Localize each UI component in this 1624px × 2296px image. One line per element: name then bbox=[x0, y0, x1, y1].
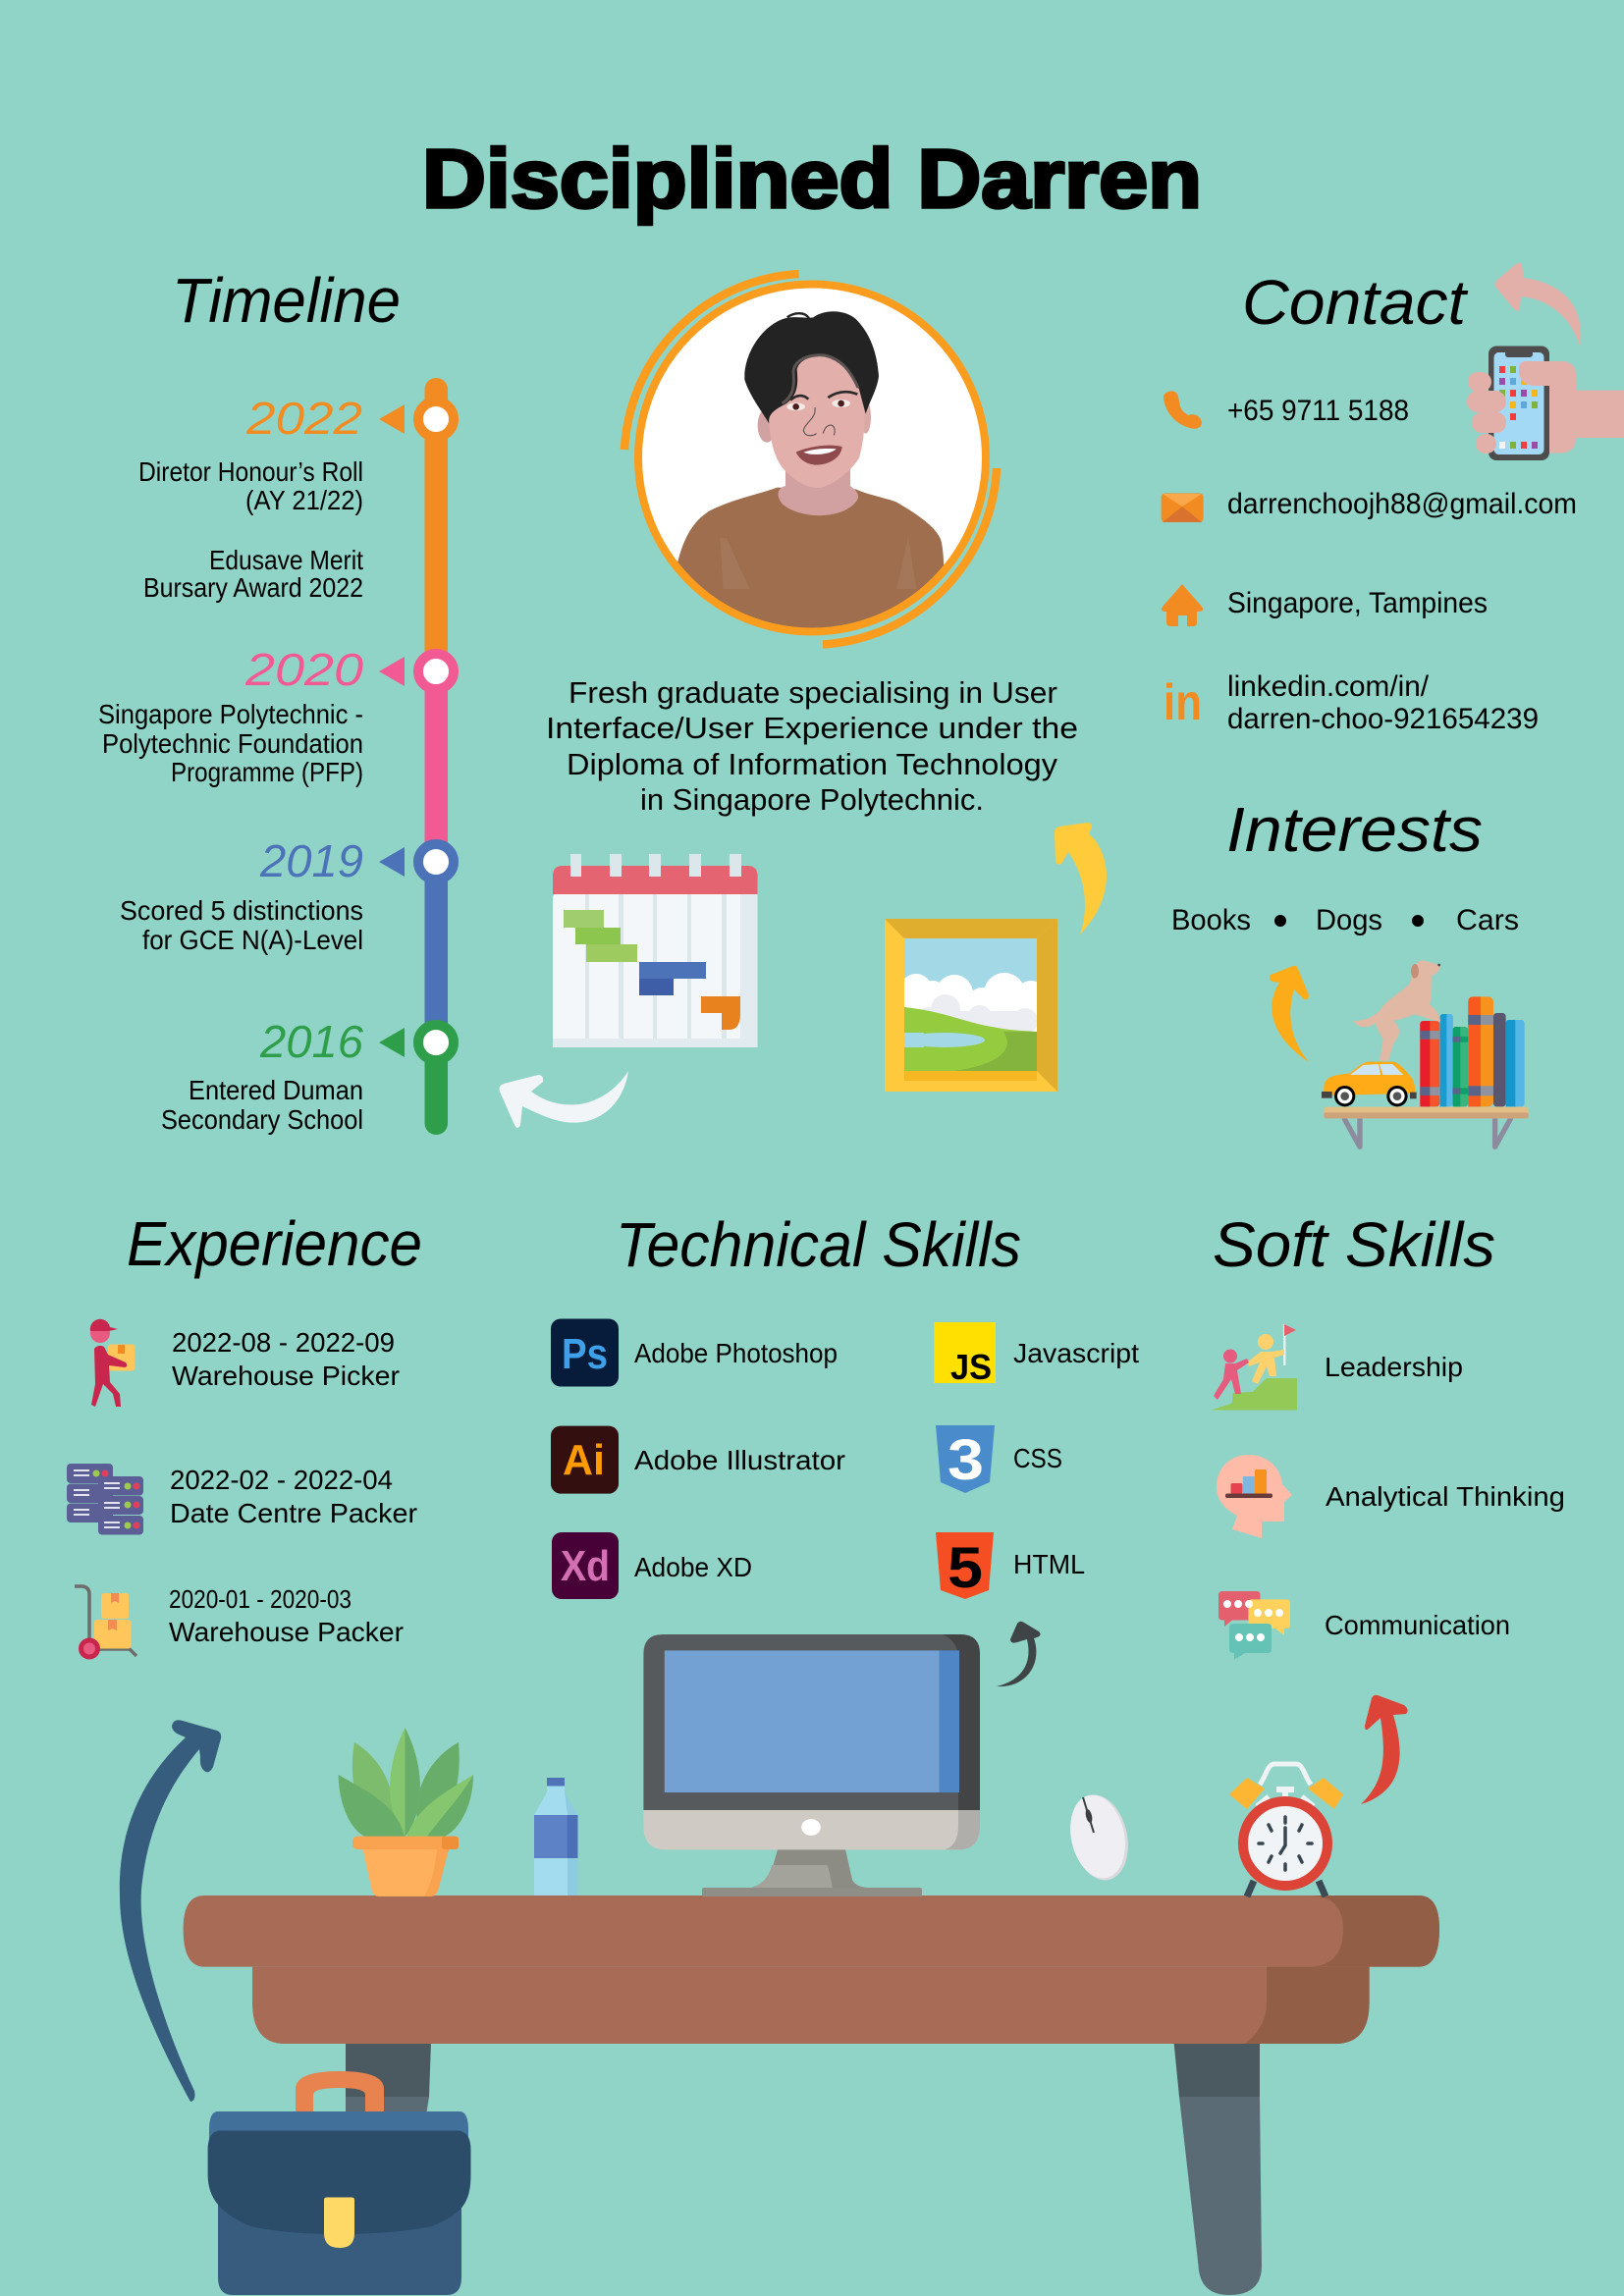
skill: illustrator: Ai bbox=[563, 1436, 605, 1484]
desk left leg bbox=[346, 2042, 431, 2115]
contact: linkedin bbox=[1164, 670, 1539, 735]
interests list: Books bbox=[1171, 904, 1251, 936]
skill: xd bbox=[552, 1532, 752, 1599]
experience item: data centre packer: Date Centre Packer bbox=[170, 1498, 417, 1528]
text block: summary: Diploma of Information Technology bbox=[567, 747, 1058, 781]
illustration: briefcase bbox=[208, 2071, 471, 2295]
skill: html: 5 bbox=[947, 1536, 983, 1600]
timeline entry 2020 bbox=[98, 644, 454, 787]
title: Disciplined Darren bbox=[422, 133, 1202, 225]
skill: illustrator: Adobe Illustrator bbox=[634, 1445, 845, 1475]
skill: communication bbox=[1218, 1591, 1510, 1660]
timeline entry 2020: Singapore Polytechnic - bbox=[98, 699, 363, 729]
experience item: data centre packer bbox=[67, 1464, 417, 1535]
heading: timeline: Timeline bbox=[172, 265, 401, 336]
contact: location bbox=[1162, 584, 1488, 626]
icon: trolley bbox=[75, 1586, 136, 1659]
illustration: desk bbox=[184, 1896, 1439, 2295]
illustration: shelf with books, dog and car bbox=[1322, 960, 1529, 1147]
icon: climbing team bbox=[1212, 1324, 1297, 1410]
text block: summary: in Singapore Polytechnic. bbox=[640, 782, 984, 817]
monitor stand bbox=[702, 1849, 922, 1896]
panel: timeline bbox=[98, 265, 454, 1135]
skill: illustrator bbox=[551, 1426, 845, 1494]
timeline entry 2019: Scored 5 distinctions bbox=[120, 895, 363, 926]
arrow: red bbox=[1361, 1695, 1408, 1804]
text block: summary: Fresh graduate specialising in User bbox=[568, 675, 1057, 710]
illustration: alarm clock bbox=[1229, 1764, 1343, 1896]
skill: photoshop: Adobe Photoshop bbox=[634, 1338, 838, 1368]
timeline entry 2016: Entered Duman bbox=[189, 1075, 363, 1105]
contact: location: Singapore, Tampines bbox=[1227, 587, 1488, 619]
experience item: data centre packer: 2022-02 - 2022-04 bbox=[170, 1465, 393, 1495]
experience item: warehouse picker bbox=[90, 1319, 400, 1407]
skill: xd: Adobe XD bbox=[634, 1552, 752, 1582]
skill: leadership bbox=[1212, 1324, 1463, 1410]
timeline entry 2020: Programme (PFP) bbox=[171, 757, 363, 787]
monitor chin bbox=[643, 1810, 980, 1849]
desk right leg bbox=[1174, 2042, 1262, 2295]
icon: servers bbox=[67, 1464, 143, 1535]
skill: html: HTML bbox=[1013, 1549, 1085, 1579]
illustration: monitor bbox=[643, 1634, 980, 1896]
timeline track bbox=[424, 378, 448, 1135]
illustration: mouse bbox=[1063, 1789, 1136, 1886]
icon: delivery worker bbox=[90, 1319, 135, 1407]
timeline entry 2020: 2020 bbox=[244, 644, 363, 695]
experience item: warehouse packer bbox=[75, 1584, 404, 1659]
timeline entry 2022: Bursary Award 2022 bbox=[143, 572, 363, 603]
heading: experience: Experience bbox=[127, 1208, 422, 1279]
skill: analytical thinking bbox=[1217, 1455, 1565, 1538]
timeline entry 2016: 2016 bbox=[259, 1016, 363, 1067]
desk top bbox=[184, 1896, 1439, 1967]
skill: css: CSS bbox=[1013, 1443, 1062, 1473]
arrow: yellow bbox=[1055, 823, 1107, 934]
arrow: dark bbox=[997, 1622, 1041, 1686]
skill: css: 3 bbox=[947, 1428, 984, 1492]
illustration: water bottle bbox=[534, 1778, 577, 1896]
timeline entry 2016 bbox=[161, 1016, 454, 1135]
heading: technical skills: Technical Skills bbox=[616, 1209, 1021, 1280]
arrow: blue bbox=[120, 1720, 221, 2102]
timeline entry 2020: Polytechnic Foundation bbox=[102, 728, 363, 759]
skill: javascript bbox=[934, 1322, 1139, 1387]
panel: experience bbox=[67, 1208, 422, 1659]
experience item: warehouse packer: Warehouse Packer bbox=[169, 1617, 404, 1647]
skill: css bbox=[936, 1425, 1062, 1493]
contact: linkedin: darren-choo-921654239 bbox=[1227, 703, 1539, 735]
skill: javascript: JS bbox=[950, 1347, 992, 1387]
interests list: Dogs bbox=[1316, 904, 1382, 936]
skill: photoshop bbox=[551, 1319, 838, 1386]
timeline entry 2022: (AY 21/22) bbox=[245, 485, 363, 515]
timeline entry 2019: 2019 bbox=[259, 835, 363, 886]
skill: javascript: Javascript bbox=[1013, 1338, 1139, 1368]
portrait bbox=[624, 274, 997, 655]
heading: interests: Interests bbox=[1226, 794, 1483, 865]
arrow: pink bbox=[1494, 263, 1581, 346]
timeline entry 2022 bbox=[138, 393, 454, 603]
interests list: Cars bbox=[1456, 904, 1519, 936]
panel: technical skills bbox=[551, 1209, 1139, 1600]
arrow: orange bbox=[1270, 966, 1309, 1062]
experience item: warehouse picker: 2022-08 - 2022-09 bbox=[172, 1327, 395, 1358]
panel: soft skills bbox=[1212, 1209, 1565, 1660]
panel: contact bbox=[1162, 263, 1624, 735]
heading: contact: Contact bbox=[1242, 267, 1468, 338]
skill: communication: Communication bbox=[1325, 1610, 1510, 1640]
skill: leadership: Leadership bbox=[1325, 1352, 1463, 1382]
timeline entry 2022: 2022 bbox=[245, 393, 362, 444]
heading: soft skills: Soft Skills bbox=[1213, 1209, 1495, 1280]
contact: email: darrenchoojh88@gmail.com bbox=[1227, 488, 1577, 520]
timeline entry 2016: Secondary School bbox=[161, 1104, 363, 1135]
interests list bbox=[1171, 904, 1519, 936]
icon: hand holding phone bbox=[1467, 346, 1624, 460]
skill: html bbox=[936, 1532, 1085, 1600]
skill: photoshop: Ps bbox=[562, 1330, 608, 1378]
monitor bezel bbox=[643, 1634, 980, 1810]
skill: xd: Xd bbox=[561, 1542, 610, 1590]
arrow: white bbox=[499, 1071, 628, 1128]
text block: summary: Interface/User Experience under the bbox=[546, 711, 1078, 745]
contact: phone bbox=[1164, 391, 1409, 429]
timeline entry 2019 bbox=[120, 835, 454, 955]
contact: linkedin: linkedin.com/in/ bbox=[1227, 670, 1430, 703]
timeline entry 2019: for GCE N(A)-Level bbox=[142, 925, 363, 955]
contact: linkedin: in bbox=[1164, 674, 1202, 731]
timeline entry 2022: Diretor Honour’s Roll bbox=[138, 456, 363, 487]
skill: analytical thinking: Analytical Thinking bbox=[1326, 1481, 1565, 1512]
timeline entry 2022: Edusave Merit bbox=[209, 545, 363, 575]
icon: chat bubbles bbox=[1218, 1591, 1290, 1660]
experience item: warehouse packer: 2020-01 - 2020-03 bbox=[169, 1584, 352, 1614]
text block: summary bbox=[546, 675, 1078, 817]
panel: interests bbox=[1171, 794, 1529, 1147]
desk lower body bbox=[252, 1967, 1370, 2044]
contact: phone: +65 9711 5188 bbox=[1227, 395, 1409, 427]
icon: head with chart bbox=[1217, 1455, 1292, 1538]
monitor screen bbox=[665, 1650, 959, 1792]
illustration: plant bbox=[339, 1728, 473, 1896]
icon: landscape picture bbox=[885, 919, 1057, 1092]
icon: gantt calendar bbox=[553, 854, 758, 1047]
experience item: warehouse picker: Warehouse Picker bbox=[172, 1361, 400, 1391]
